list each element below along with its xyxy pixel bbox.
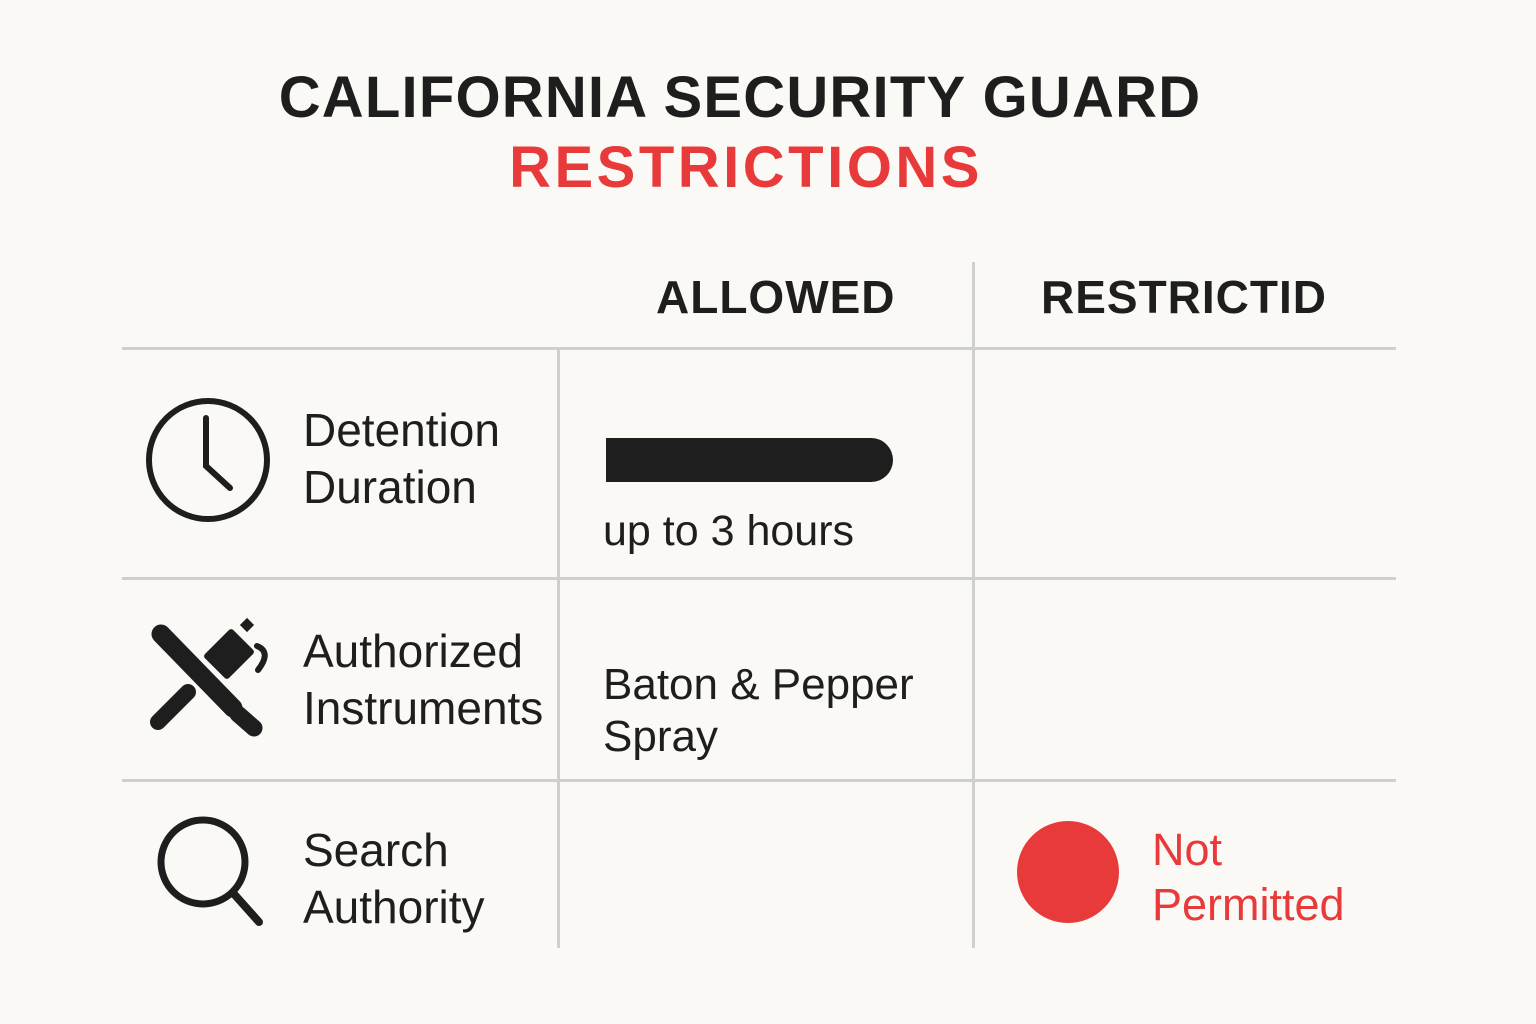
label: detention duration: Duration [303,461,477,513]
label: search authority: Search [303,824,449,876]
icon: instruments [150,618,268,736]
text: baton & pepper spray: Baton & Pepper [603,660,914,709]
icon: search [158,816,263,926]
text: baton & pepper spray [603,660,914,761]
label: search authority: Authority [303,881,485,933]
label: authorized instruments: Authorized [303,625,523,677]
label: search authority [303,824,485,933]
bar: detention [606,438,893,482]
text: not permitted: Permitted [1152,879,1345,930]
icon: red dot [1017,821,1119,923]
icon: clock [146,398,270,522]
label: authorized instruments: Instruments [303,682,543,734]
subtitle: RESTRICTIONS [509,135,983,200]
text: not permitted: Not [1152,824,1222,875]
text: baton & pepper spray: Spray [603,712,718,761]
text: not permitted [1152,824,1345,930]
title: CALIFORNIA SECURITY GUARD [279,65,1201,130]
label: detention duration [303,404,500,513]
text: up to 3 hours: up to 3 hours [603,507,854,555]
header: allowed: ALLOWED [656,271,896,323]
header: restricted: RESTRICTID [1041,271,1327,323]
label: detention duration: Detention [303,404,500,456]
label: authorized instruments [303,625,543,734]
